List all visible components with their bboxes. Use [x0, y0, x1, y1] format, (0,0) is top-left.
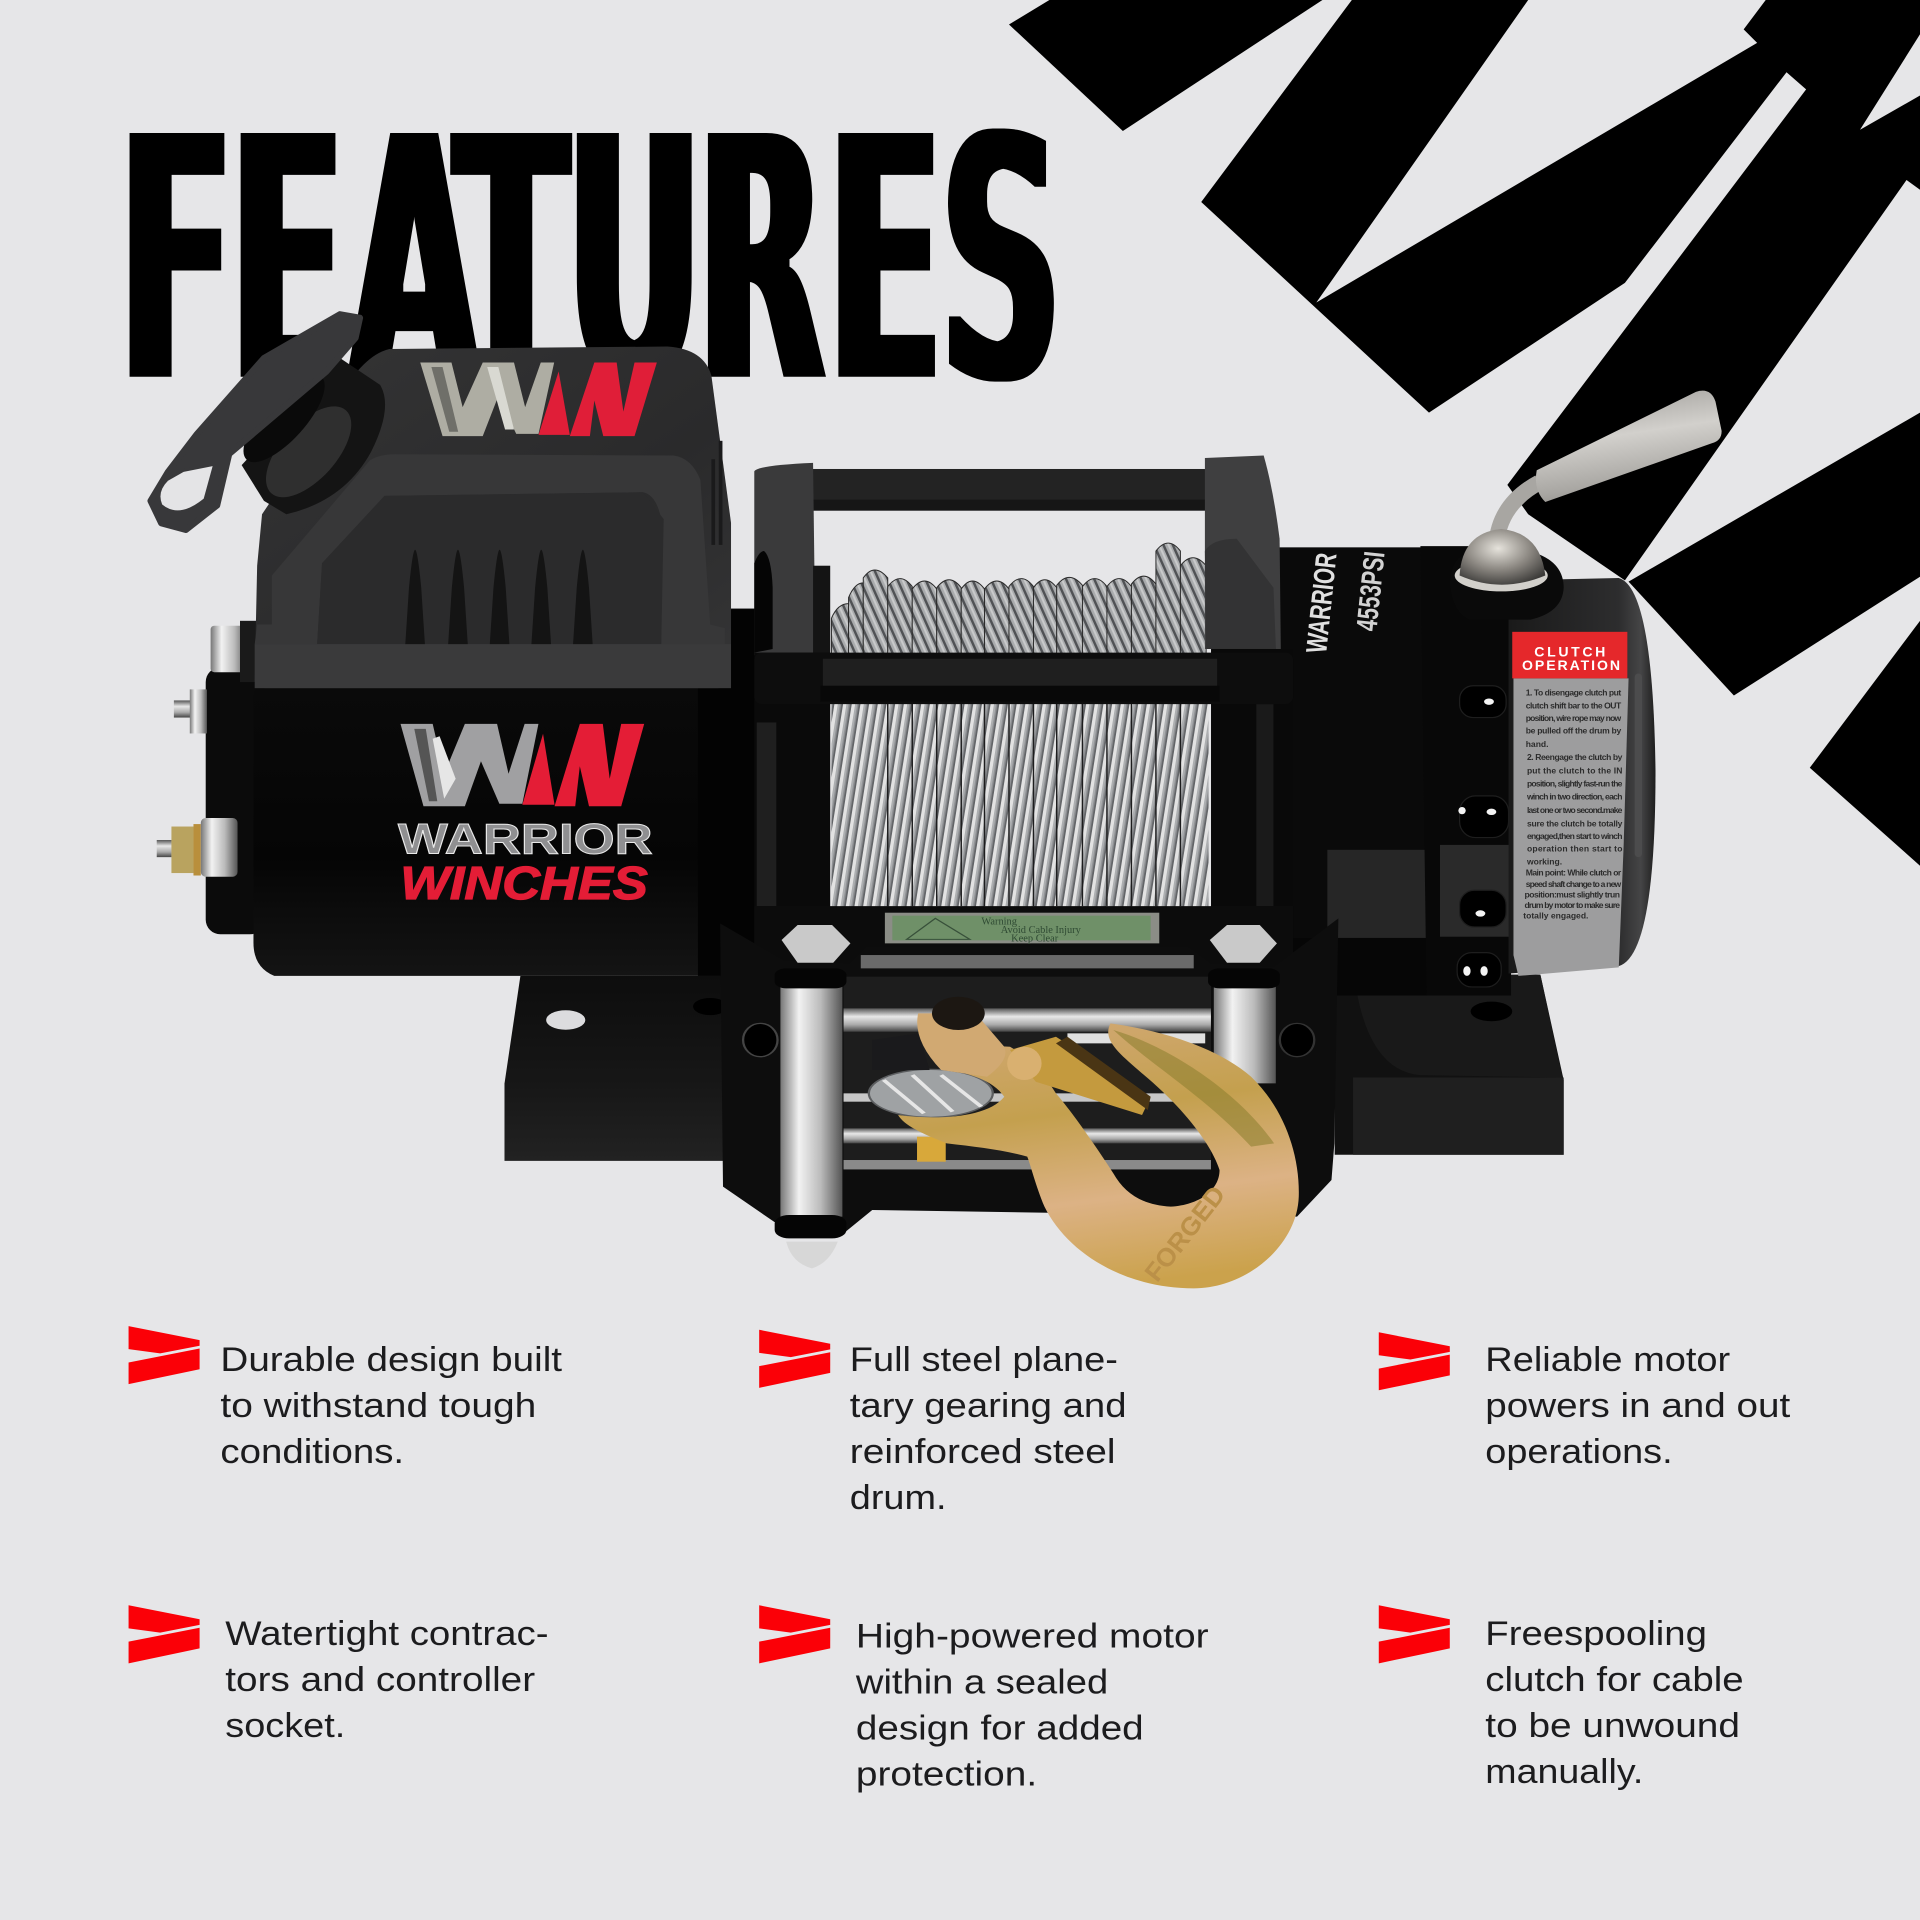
warning plate text: Keep Clear — [1011, 934, 1059, 945]
icon: red chevron — [1379, 1332, 1450, 1390]
label instructions: position, slightly fast-run the — [1527, 779, 1623, 789]
wire rope drum — [831, 543, 1209, 909]
right housing ring — [1276, 546, 1511, 996]
warning plate text: Warning — [981, 916, 1017, 927]
feature: watertight contractors: Watertight contrac- — [225, 1615, 549, 1653]
side ribs — [711, 441, 722, 545]
ventilation slots — [405, 550, 593, 644]
label instructions: hand. — [1526, 739, 1549, 749]
feature: freespooling clutch: manually. — [1485, 1753, 1643, 1791]
feature: sealed motor: High-powered motor — [856, 1618, 1209, 1656]
base behind fairlead — [754, 906, 1293, 992]
background black zigzag stripes — [1009, 0, 1920, 866]
feature: sealed motor — [759, 1605, 1209, 1793]
right mounting foot — [1335, 975, 1564, 1155]
power socket with rubber cap — [151, 314, 385, 530]
rope upper coils — [831, 543, 1206, 661]
drum end cap — [1509, 578, 1656, 973]
feature: steel gearing: drum. — [850, 1479, 947, 1517]
winch product illustration — [151, 314, 1722, 1288]
label instructions: speed shaft change to a new — [1526, 879, 1622, 889]
warning plate text: Avoid Cable Injury — [1001, 925, 1082, 936]
right roller — [1214, 987, 1276, 1083]
icon: red chevron — [1379, 1605, 1450, 1663]
feature: steel gearing — [759, 1330, 1127, 1517]
label instructions: Main point: While clutch or — [1526, 868, 1622, 878]
clutch lever — [1450, 391, 1722, 620]
label instructions: clutch shift bar to the OUT — [1526, 700, 1622, 710]
feature: steel gearing: Full steel plane- — [850, 1341, 1118, 1379]
label instructions: position, wire rope may now — [1526, 713, 1622, 723]
feature: freespooling clutch: clutch for cable — [1485, 1661, 1744, 1699]
label instructions: 2. Reengage the clutch by — [1527, 752, 1623, 762]
label instructions: winch in two direction, each — [1526, 792, 1622, 802]
feature: sealed motor: protection. — [856, 1755, 1037, 1793]
feature: durable design — [129, 1326, 563, 1471]
feature: steel gearing: reinforced steel — [850, 1433, 1116, 1471]
top logo on control box — [420, 363, 657, 436]
clevis hook and wire loop — [869, 997, 1299, 1288]
label heading: CLUTCH — [1534, 643, 1605, 659]
label instructions: 1. To disengage clutch put — [1526, 688, 1621, 698]
label instructions: position:must slightly trun — [1524, 890, 1620, 900]
feature: durable design: conditions. — [220, 1433, 404, 1471]
label instructions — [1523, 688, 1623, 920]
left plate — [754, 463, 816, 655]
feature: watertight contractors: socket. — [225, 1707, 345, 1745]
label instructions: put the clutch to the IN — [1527, 765, 1622, 775]
frame tie bars and side plates — [754, 456, 1293, 992]
icon: red chevron — [129, 1326, 200, 1384]
icon: red chevron — [759, 1605, 830, 1663]
icon: red chevron — [129, 1605, 200, 1663]
housing bolts — [1457, 686, 1509, 987]
feature: reliable motor: operations. — [1485, 1433, 1673, 1471]
title: FEATURES — [120, 62, 1061, 462]
label instructions: sure the clutch be totally — [1527, 819, 1623, 829]
latch — [1010, 1037, 1151, 1115]
middle tie bar — [754, 653, 1293, 704]
label instructions: working. — [1526, 856, 1562, 866]
label instructions: last one or two second.make — [1527, 805, 1623, 815]
shackle — [917, 1013, 1005, 1077]
brand sub-wordmark: WINCHES — [400, 857, 648, 909]
feature: steel gearing: tary gearing and — [850, 1387, 1127, 1425]
brand wordmark: WARRIOR — [398, 815, 653, 863]
feature: watertight contractors: tors and controller — [225, 1661, 535, 1699]
hook marking: FORGED — [1140, 1181, 1231, 1287]
label instructions: be pulled off the drum by — [1526, 725, 1621, 735]
warning plate text — [981, 916, 1082, 945]
left mounting foot — [504, 976, 727, 1161]
model text: 4553PSI — [1350, 550, 1392, 633]
icon: red chevron — [759, 1330, 830, 1388]
clutch operation label — [1512, 632, 1629, 976]
motor cylinder — [253, 609, 759, 976]
feature: reliable motor: powers in and out — [1485, 1387, 1791, 1425]
rope lower coils — [831, 698, 1209, 909]
label heading line two: OPERATION — [1522, 657, 1620, 673]
feature: freespooling clutch: to be unwound — [1485, 1707, 1740, 1745]
feature: reliable motor: Reliable motor — [1485, 1341, 1730, 1379]
label instructions: drum by motor to make sure — [1524, 900, 1620, 910]
feature: sealed motor: design for added — [856, 1709, 1144, 1747]
feature: freespooling clutch: Freespooling — [1485, 1615, 1707, 1653]
left roller — [780, 987, 842, 1217]
warning plate — [885, 913, 1159, 943]
label instructions: engaged,then start to winch — [1527, 831, 1622, 841]
feature: freespooling clutch — [1379, 1605, 1744, 1791]
feature: watertight contractors — [129, 1605, 549, 1745]
right plate — [1205, 456, 1281, 649]
label instructions: totally engaged. — [1523, 910, 1588, 920]
bolts — [782, 925, 850, 963]
roller fairlead — [720, 913, 1338, 1268]
motor end cap and terminals — [157, 621, 264, 934]
label instructions: operation then start to — [1527, 844, 1622, 854]
feature: durable design: to withstand tough — [220, 1387, 536, 1425]
hook body — [898, 1023, 1299, 1288]
main logo badge on motor — [398, 724, 653, 909]
feature: reliable motor — [1379, 1332, 1791, 1471]
feature: durable design: Durable design built — [220, 1341, 563, 1379]
housing text: WARRIOR — [1300, 551, 1344, 655]
feature: sealed motor: within a sealed — [855, 1663, 1108, 1701]
control box housing — [255, 347, 731, 688]
